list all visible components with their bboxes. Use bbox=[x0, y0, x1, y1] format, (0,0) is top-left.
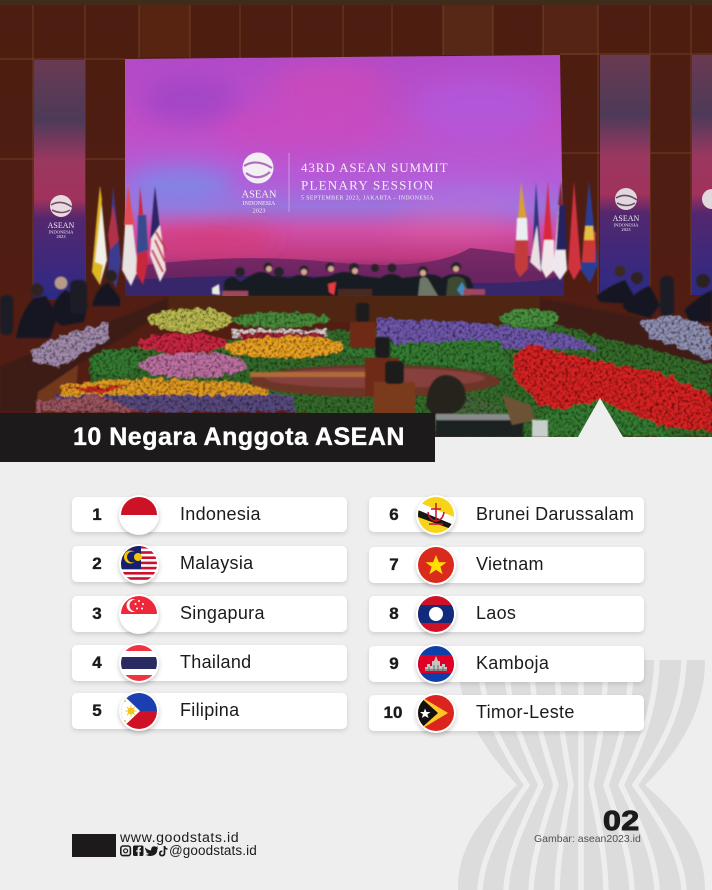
screen logo and text bbox=[241, 152, 448, 214]
row 8: Laos: Laos bbox=[476, 603, 516, 623]
central round platform and podiums bbox=[250, 303, 500, 414]
screen logo and text: PLENARY SESSION bbox=[301, 178, 434, 192]
page number: 02 bbox=[603, 805, 640, 836]
image credit: Gambar: asean2023.id bbox=[534, 833, 641, 845]
screen logo and text: 2023 bbox=[252, 208, 266, 214]
footer social handle: @goodstats.id bbox=[169, 843, 257, 858]
icon: Laos flag bbox=[416, 594, 456, 634]
flags left bbox=[92, 184, 166, 288]
row 7: Vietnam bbox=[369, 547, 644, 583]
side banners: INDONESIA bbox=[48, 230, 74, 234]
title banner bbox=[0, 413, 435, 462]
row 1: Indonesia bbox=[72, 497, 347, 532]
right table and delegates bbox=[540, 266, 712, 372]
row 10: Timor-Leste bbox=[369, 695, 644, 731]
flower arrangements bbox=[30, 308, 712, 437]
row 5: Filipina bbox=[72, 693, 347, 729]
screen logo and text: INDONESIA bbox=[243, 201, 276, 207]
row 10: Timor-Leste: 10 bbox=[384, 703, 402, 722]
side banners: 2023 bbox=[621, 227, 631, 232]
row 2: Malaysia bbox=[72, 546, 347, 582]
row 5: Filipina: Filipina bbox=[180, 700, 239, 720]
left table and delegates bbox=[0, 270, 168, 412]
row 4: Thailand: 4 bbox=[92, 653, 102, 672]
row 8: Laos: 8 bbox=[389, 604, 399, 623]
side banners: ASEAN bbox=[48, 221, 75, 230]
row 1: Indonesia: 1 bbox=[92, 505, 102, 524]
row 3: Singapura: Singapura bbox=[180, 603, 265, 623]
wall panels bbox=[0, 0, 712, 437]
icon: Malaysia flag bbox=[119, 544, 159, 584]
screen logo and text: 5 SEPTEMBER 2023, JAKARTA – INDONESIA bbox=[301, 196, 434, 202]
row 9: Kamboja bbox=[369, 646, 644, 682]
row 8: Laos bbox=[369, 596, 644, 632]
row 9: Kamboja: Kamboja bbox=[476, 653, 549, 673]
row 1: Indonesia: Indonesia bbox=[180, 504, 261, 524]
row 6: Brunei Darussalam bbox=[369, 497, 644, 532]
footer social icons bbox=[120, 845, 168, 856]
back table delegates bbox=[212, 262, 485, 297]
side banners bbox=[34, 55, 712, 300]
row 3: Singapura bbox=[72, 596, 347, 632]
flags right bbox=[515, 180, 598, 283]
side banners: 2023 bbox=[56, 234, 66, 239]
row 6: Brunei Darussalam: 6 bbox=[389, 505, 399, 524]
stage screen bbox=[120, 50, 570, 300]
row 6: Brunei Darussalam: Brunei Darussalam bbox=[476, 504, 634, 524]
row 2: Malaysia: 2 bbox=[92, 554, 102, 573]
seated figure, monitor and bottles bbox=[426, 375, 548, 437]
icon: Indonesia flag bbox=[119, 494, 159, 534]
icon: Philippines flag bbox=[119, 691, 159, 731]
row 9: Kamboja: 9 bbox=[389, 654, 399, 673]
icon: Timor-Leste flag bbox=[416, 693, 456, 733]
row 5: Filipina: 5 bbox=[92, 701, 102, 720]
footer website text: www.goodstats.id bbox=[120, 830, 239, 846]
photo: ASEAN summit plenary session bbox=[0, 0, 712, 437]
triangle notch bbox=[578, 398, 623, 437]
row 3: Singapura: 3 bbox=[92, 604, 102, 623]
icon: Singapore flag bbox=[119, 594, 159, 634]
icon: Vietnam flag bbox=[416, 545, 456, 585]
row 4: Thailand: Thailand bbox=[180, 652, 251, 672]
back table bbox=[168, 296, 540, 322]
footer logo block bbox=[72, 834, 116, 857]
title text: 10 Negara Anggota ASEAN bbox=[73, 423, 405, 451]
side banners: ASEAN bbox=[613, 214, 640, 223]
row 10: Timor-Leste: Timor-Leste bbox=[476, 702, 575, 722]
row 7: Vietnam: 7 bbox=[389, 555, 399, 574]
row 2: Malaysia: Malaysia bbox=[180, 553, 253, 573]
side banners: INDONESIA bbox=[613, 222, 639, 228]
screen logo and text: ASEAN bbox=[241, 190, 277, 200]
icon: Brunei flag bbox=[416, 494, 456, 534]
row 7: Vietnam: Vietnam bbox=[476, 554, 544, 574]
icon: Cambodia flag bbox=[416, 644, 456, 684]
row 4: Thailand bbox=[72, 645, 347, 681]
icon: Thailand flag bbox=[119, 643, 159, 683]
screen logo and text: 43RD ASEAN SUMMIT bbox=[301, 160, 448, 175]
